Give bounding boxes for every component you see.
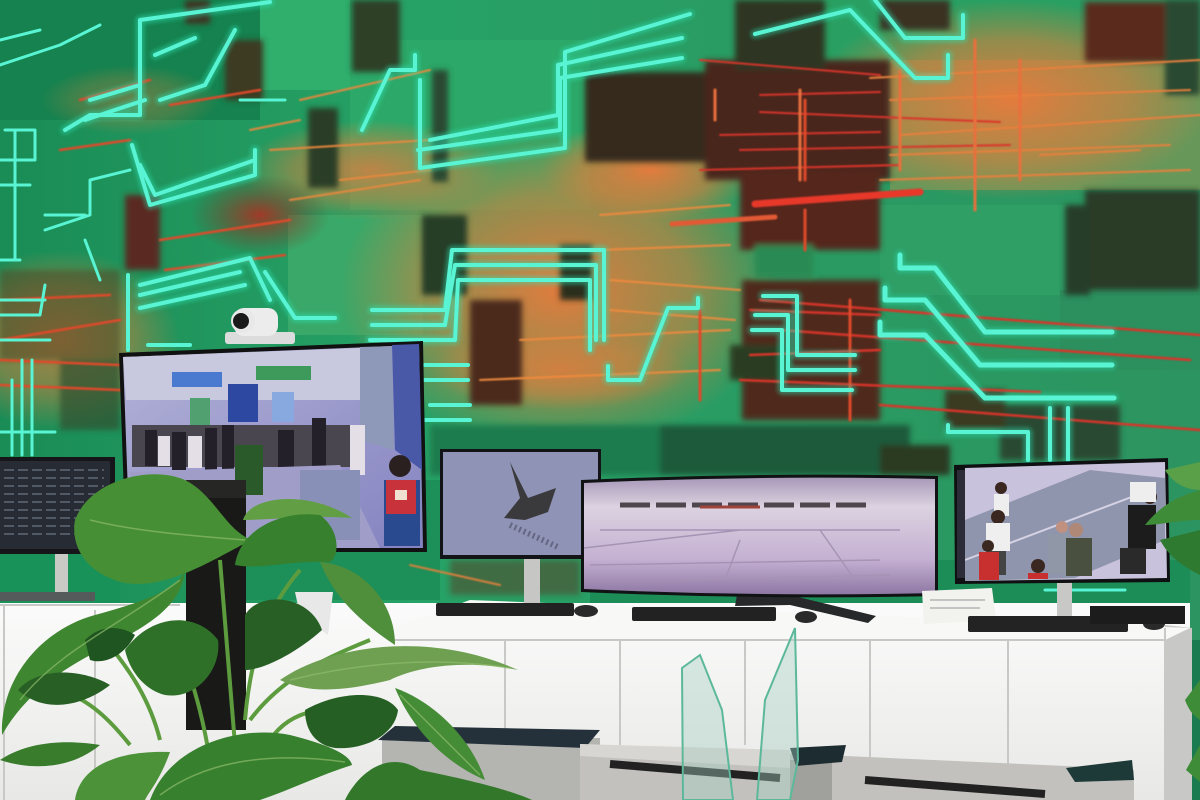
plant leaves (0, 474, 532, 800)
monitor: street camera feed (954, 458, 1185, 632)
glow layer (65, 0, 1114, 460)
monitor: grey point cloud map (436, 449, 601, 617)
red and orange light streaks (0, 40, 1200, 585)
orange glow areas (0, 0, 1200, 450)
tall dark column behind plant (186, 480, 333, 730)
bright layer (0, 0, 1125, 590)
plant stems (60, 560, 380, 760)
monitor: airport departure board at left (0, 457, 115, 601)
dark block shapes (0, 0, 1200, 595)
LED wall background (0, 0, 1200, 640)
glass turnstile gate (378, 628, 1134, 800)
panel: white display cabinet (0, 600, 1192, 800)
camera on top of monitor (225, 308, 295, 344)
circuit traces on LED wall (0, 0, 1125, 590)
leaf veins (20, 520, 510, 795)
paper note on cabinet (922, 588, 996, 624)
right-edge plant (1145, 462, 1200, 782)
green tonal panels (0, 0, 1200, 640)
potted plant foliage (0, 462, 1200, 800)
monitor: camera feed of exhibition hall (119, 341, 427, 552)
monitor: ultrawide curved 3D view (581, 475, 938, 623)
